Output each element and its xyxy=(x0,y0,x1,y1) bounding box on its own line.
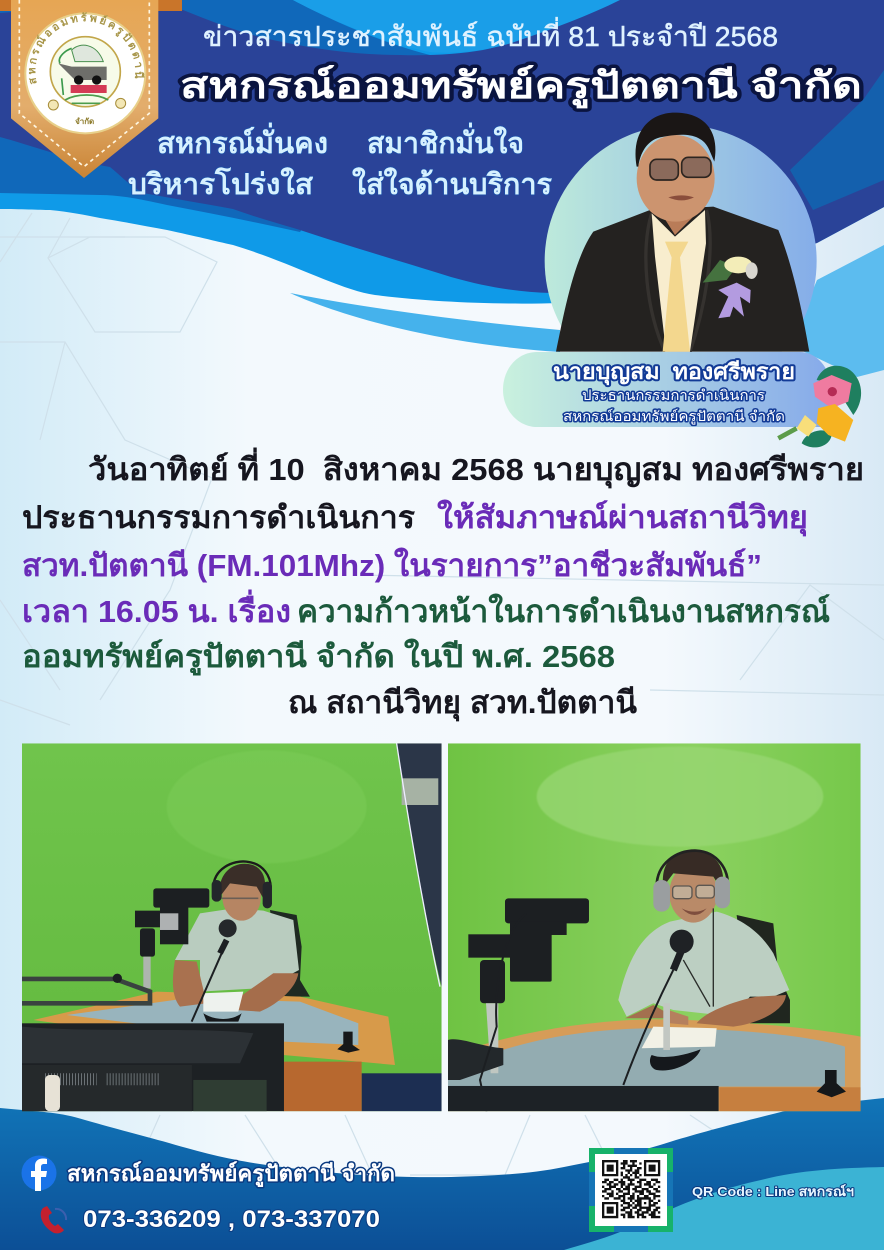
article text xyxy=(22,447,864,722)
article line 4: เวลา 16.05 น. เรื่อง xyxy=(22,589,291,629)
chairman role: ประธานกรรมการดำเนินการ xyxy=(582,387,766,403)
tropical flowers xyxy=(778,366,861,447)
article line 6: ณ สถานีวิทยุ สวท.ปัตตานี xyxy=(288,685,637,722)
newsletter issue line: ข่าวสารประชาสัมพันธ์ ฉบับที่ 81 ประจำปี 2568 xyxy=(203,17,778,52)
desk knob xyxy=(337,1032,360,1053)
webcam and mounts xyxy=(135,888,209,957)
chair xyxy=(737,915,790,1023)
article line 3: สวท.ปัตตานี (FM.101Mhz) ในรายการ”อาชีวะสัมพันธ์” xyxy=(22,547,762,583)
logo seal: สหกรณ์ออมทรัพย์ครูปัตตานี xyxy=(28,12,145,84)
neck xyxy=(655,190,703,235)
chairman organisation: สหกรณ์ออมทรัพย์ครูปัตตานี จำกัด xyxy=(563,408,785,425)
mic arm xyxy=(22,979,150,1003)
article line 4 xyxy=(22,589,830,629)
footer teal lobe xyxy=(564,1167,884,1250)
chairman name: นายบุญสม ทองศรีพราย xyxy=(553,359,795,386)
monitor xyxy=(22,1023,284,1111)
monitor xyxy=(448,1086,719,1111)
Facebook icon xyxy=(22,1156,56,1191)
desk knob xyxy=(817,1070,846,1097)
desk xyxy=(33,992,395,1065)
headphone cable xyxy=(683,908,713,1007)
phone numbers: 073-336209 , 073-337070 xyxy=(83,1206,380,1233)
top wave: cyan lobe xyxy=(293,0,620,53)
ribbon top tab xyxy=(0,0,182,11)
suit xyxy=(556,207,809,352)
slogan block xyxy=(128,122,552,201)
name plate xyxy=(503,352,830,427)
hair xyxy=(636,113,715,167)
footer wave xyxy=(0,1098,884,1250)
article line 1: วันอาทิตย์ ที่ 10 สิงหาคม 2568 นายบุญสม ทองศรีพราย xyxy=(88,447,864,489)
QR code xyxy=(589,1148,673,1232)
ribbon body xyxy=(11,0,158,178)
logo seal: จำกัด xyxy=(75,117,94,126)
article line 2 xyxy=(22,499,808,537)
shirt xyxy=(652,210,706,352)
paper xyxy=(203,992,243,1012)
chair xyxy=(270,910,310,997)
corsage xyxy=(703,257,758,318)
hexagon line pattern xyxy=(0,213,884,1175)
logo seal xyxy=(24,12,146,134)
top wave: bright-blue band xyxy=(0,0,884,304)
article line 5: ออมทรัพย์ครูปัตตานี จำกัด ในปี พ.ศ. 2568 xyxy=(22,638,615,676)
paper xyxy=(642,1027,717,1048)
article line 4: ความก้าวหน้าในการดำเนินงานสหกรณ์ xyxy=(297,593,830,629)
tie xyxy=(663,242,690,352)
presenter xyxy=(173,861,299,1012)
article line 2: ประธานกรรมการดำเนินการ xyxy=(22,500,415,535)
portrait circle xyxy=(544,128,817,352)
portrait of chairman xyxy=(544,112,817,352)
microphone xyxy=(192,953,222,1022)
photo: left radio studio xyxy=(22,743,442,1111)
QR caption: QR Code : Line สหกรณ์ฯ xyxy=(692,1184,854,1199)
slogan block: สหกรณ์มั่นคง xyxy=(157,122,328,160)
wedge: light blue xyxy=(290,293,560,352)
desk xyxy=(448,1019,861,1111)
slogan block: ใส่ใจด้านบริการ xyxy=(352,167,552,201)
slogan block: สมาชิกมั่นใจ xyxy=(367,122,524,160)
webcam and mounts xyxy=(468,898,589,1003)
slogan block: บริหารโปร่งใส xyxy=(128,166,313,201)
Facebook page name: สหกรณ์ออมทรัพย์ครูปัตตานี จำกัด xyxy=(67,1161,395,1188)
article line 2: ให้สัมภาษณ์ผ่านสถานีวิทยุ xyxy=(437,499,808,537)
presenter xyxy=(618,851,789,1027)
microphone xyxy=(623,970,673,1085)
face xyxy=(637,135,715,222)
photo: right radio studio xyxy=(448,743,861,1111)
glasses xyxy=(650,157,711,180)
right light-blue wave xyxy=(790,245,884,377)
top wave: mid-blue left xyxy=(0,0,430,232)
ribbon with cooperative logo xyxy=(0,0,182,178)
top wave: dark navy xyxy=(0,0,884,293)
dark curtain xyxy=(397,743,442,987)
top wave: right stripe xyxy=(790,70,884,210)
phone icon xyxy=(41,1206,66,1233)
organisation title: สหกรณ์ออมทรัพย์ครูปัตตานี จำกัด xyxy=(180,65,862,109)
